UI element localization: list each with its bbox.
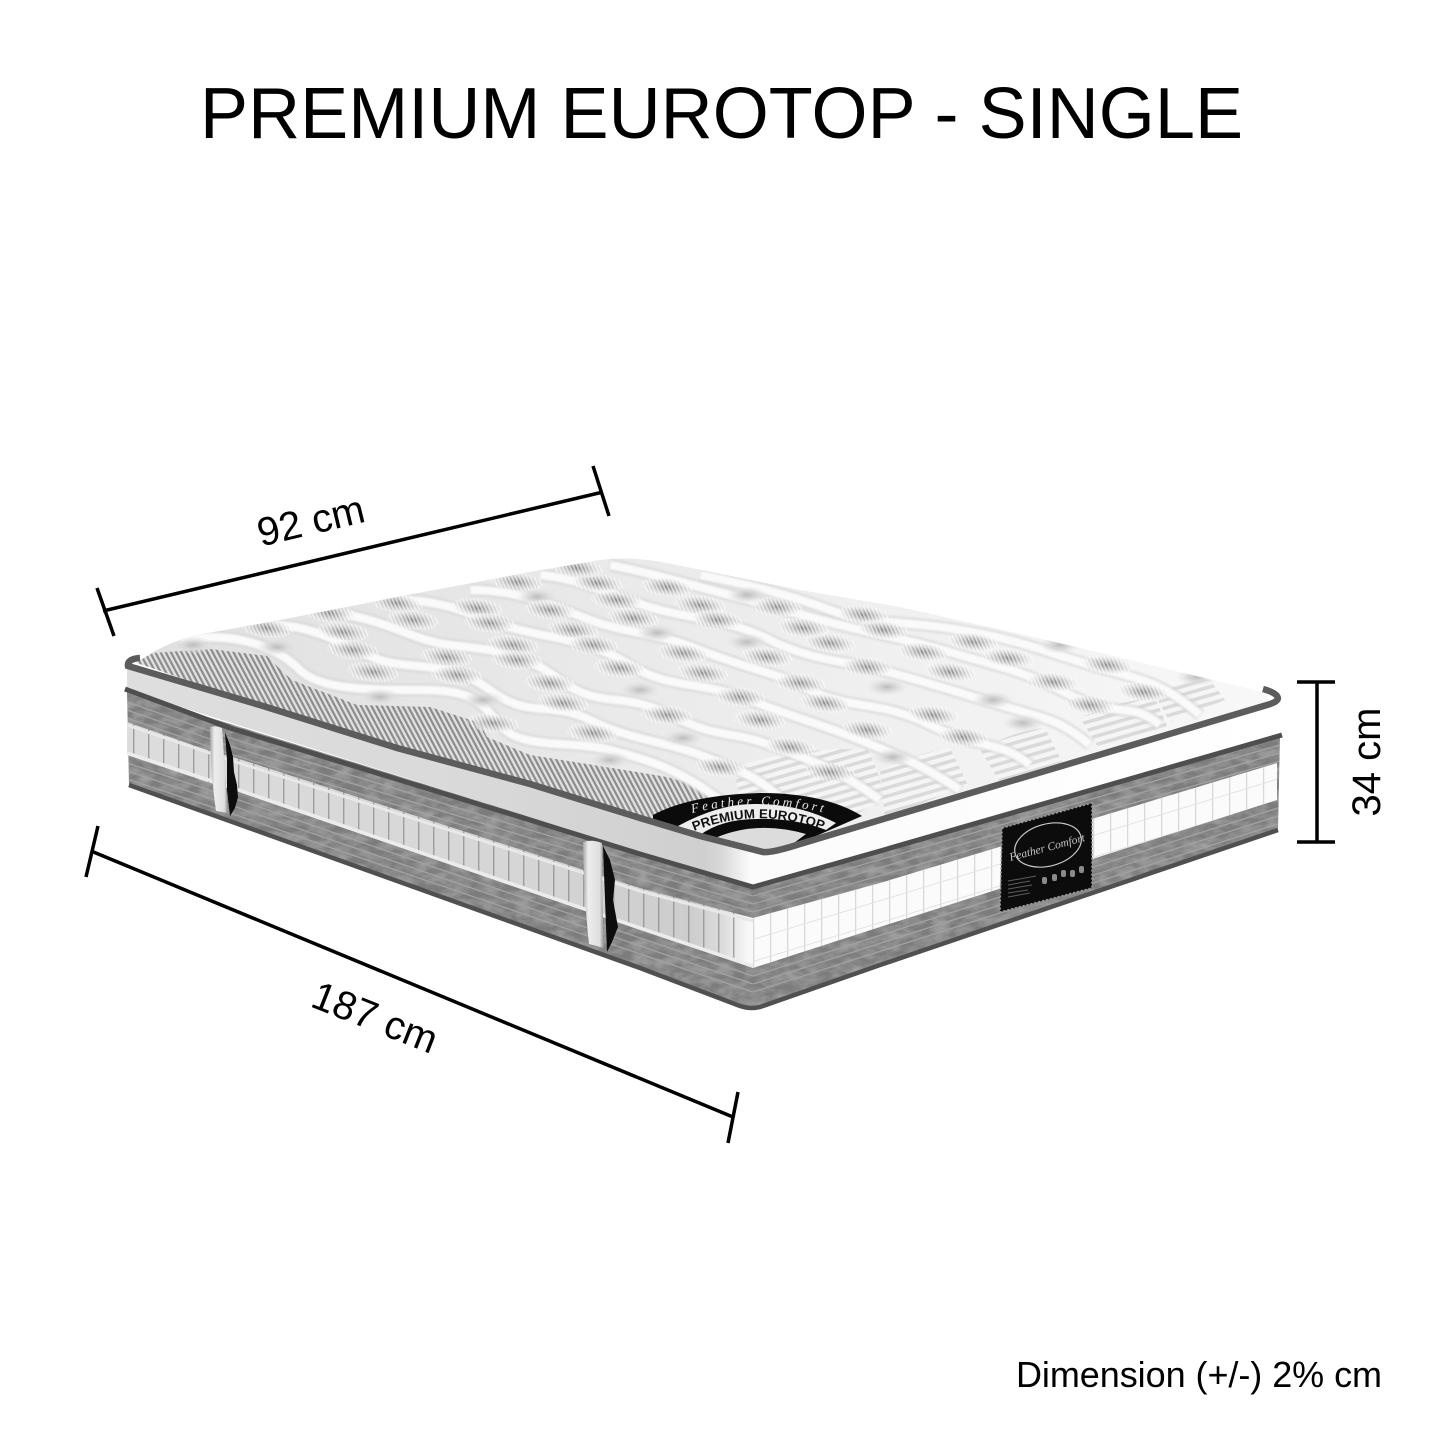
dimension: length 187 cm — [86, 826, 738, 1143]
dimension: height 34 cm: 34 cm — [1345, 708, 1389, 816]
black product label: Feather Comfort — [1007, 832, 1087, 864]
footnote: Dimension (+/-) 2% cm — [1016, 1354, 1382, 1395]
badge: premium eurotop: PREMIUM EUROTOP — [692, 809, 825, 831]
badge: premium eurotop — [653, 793, 862, 849]
side panels gray fabric — [120, 680, 1290, 1020]
quilted white band: short side — [753, 763, 1277, 968]
mattress top surface — [137, 558, 1225, 834]
tufted dimples — [172, 556, 1218, 784]
eurotop white border — [127, 665, 1280, 886]
ribbed front border — [138, 649, 708, 818]
striped panels — [736, 680, 1225, 815]
mattress illustration — [124, 558, 1283, 1010]
bottom piping — [129, 785, 1278, 1008]
black product label — [1000, 803, 1092, 912]
quilted white band: long side — [127, 722, 753, 968]
dimension: length 187 cm: 187 cm — [306, 973, 444, 1062]
title: PREMIUM EUROTOP - SINGLE — [200, 74, 1243, 154]
handle strap: left — [210, 726, 238, 816]
top piping — [128, 658, 1278, 852]
dimension: width 92 cm: 92 cm — [253, 487, 369, 555]
handle strap: centre — [583, 841, 618, 952]
badge: premium eurotop: Feather Comfort — [691, 796, 824, 813]
dimension: width 92 cm — [97, 466, 609, 636]
dimension: height 34 cm — [1297, 682, 1389, 842]
lower piping — [125, 689, 1282, 887]
quilted wave seams — [180, 565, 1200, 820]
